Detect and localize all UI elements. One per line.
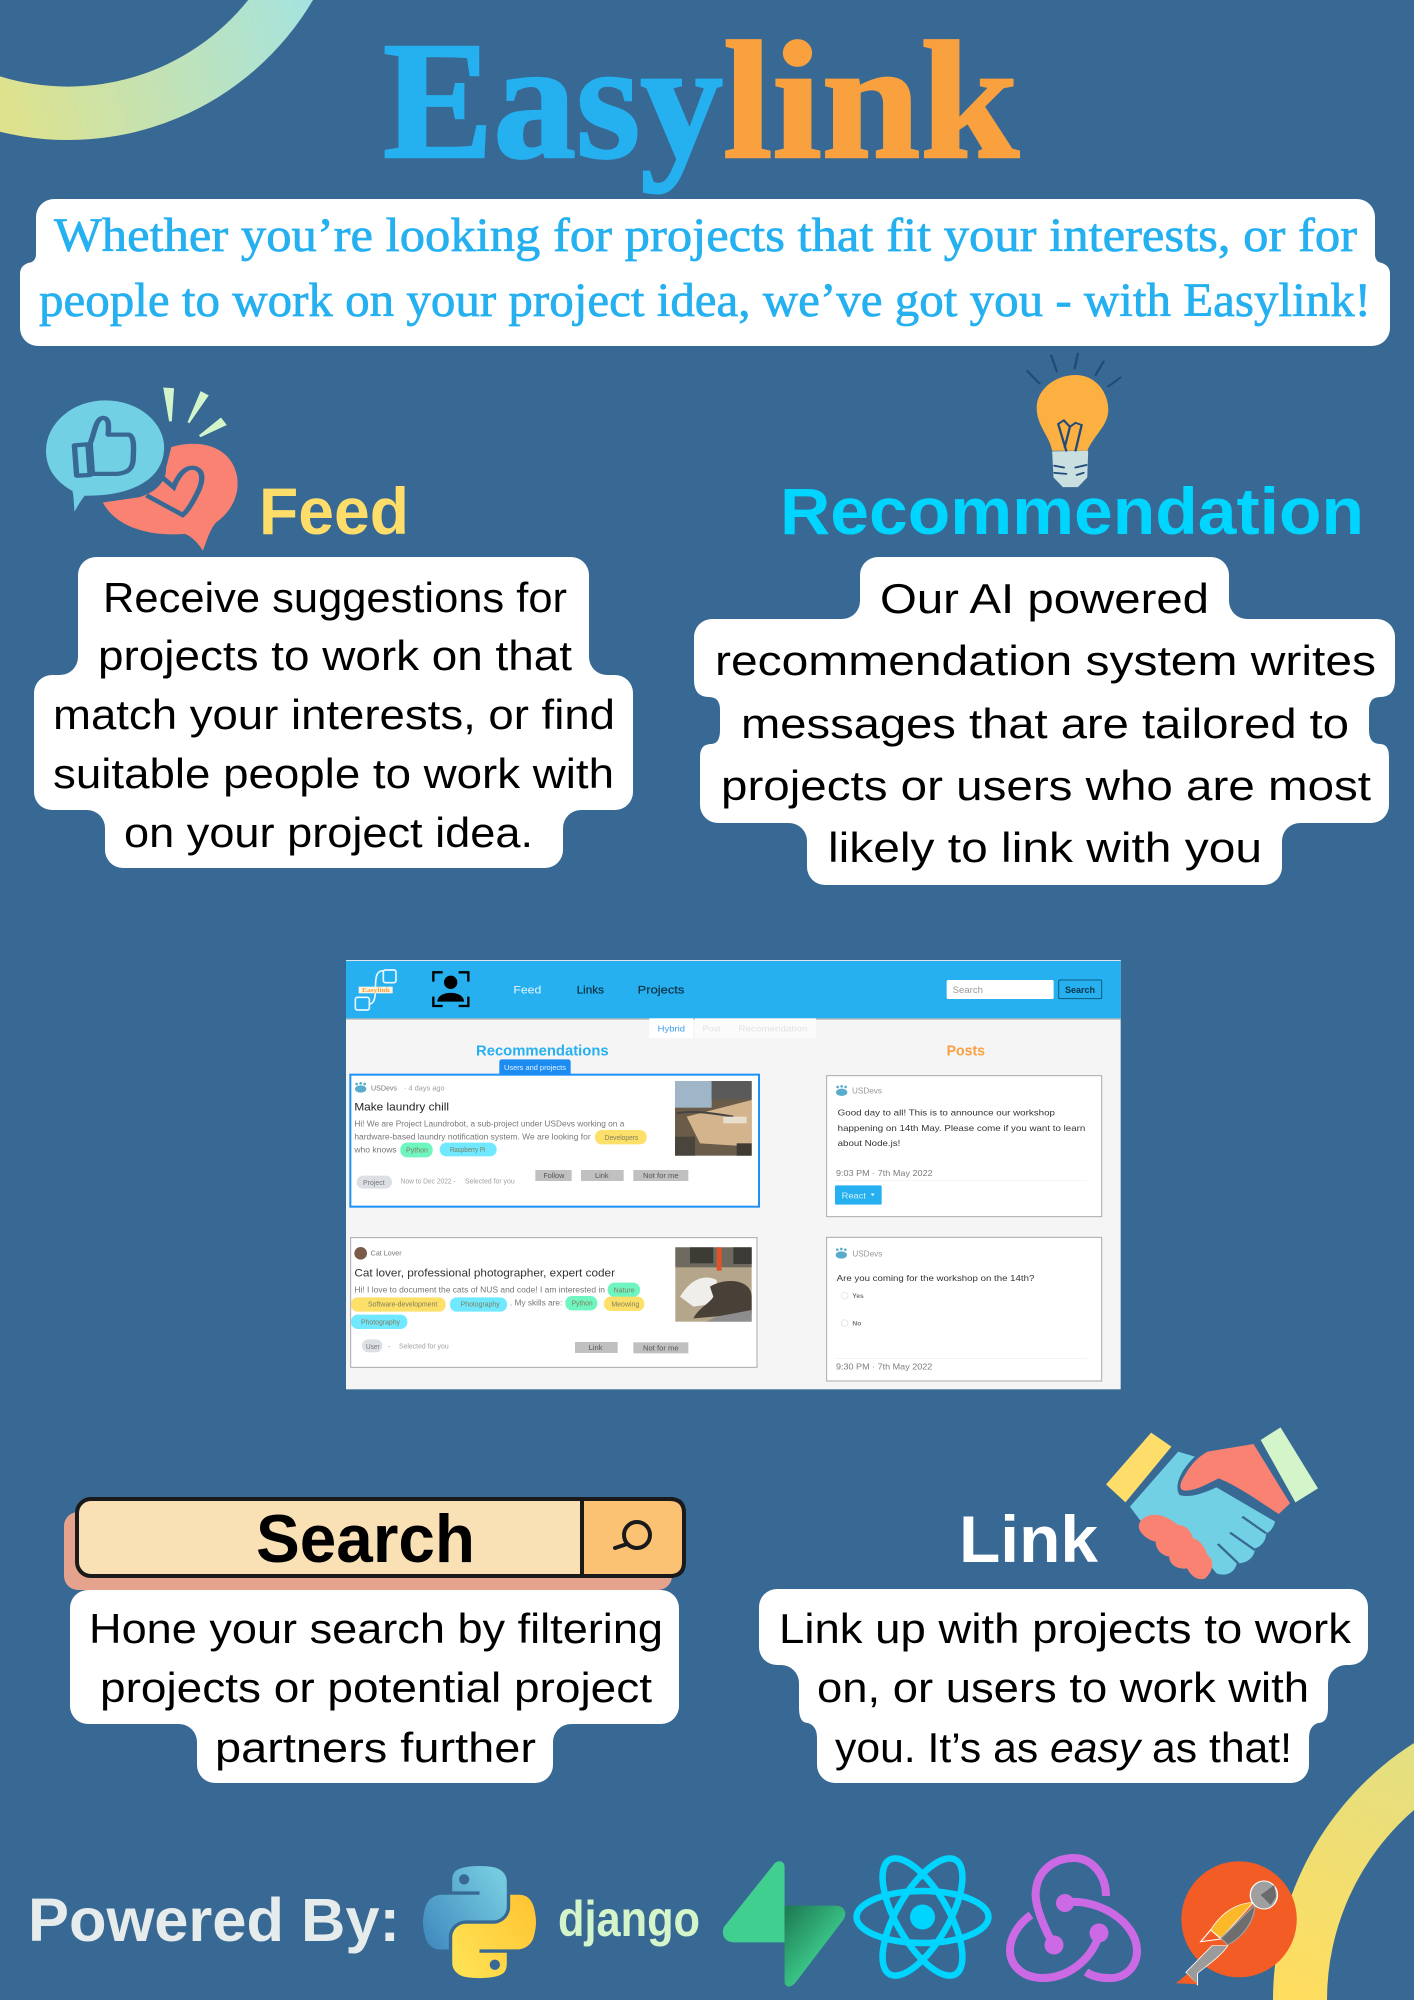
card: user recommendation: - <box>388 1341 391 1350</box>
panel: feed description: Receive suggestions for <box>103 574 567 621</box>
card: project recommendation: · 4 days ago <box>404 1083 445 1092</box>
panel: recommendation description <box>694 557 1395 885</box>
card: project recommendation: Python <box>406 1145 428 1154</box>
card: user recommendation: Nature <box>614 1285 635 1294</box>
panel: link description <box>759 1589 1368 1783</box>
panel: recommendation description: Our AI powered <box>880 575 1209 622</box>
card: user recommendation <box>351 1238 757 1367</box>
card: project recommendation: USDevs <box>371 1083 397 1092</box>
card: user recommendation: Cat Lover <box>371 1248 402 1257</box>
card: user recommendation: User <box>366 1342 380 1351</box>
panel: link description: Link up with projects to work <box>779 1605 1352 1652</box>
card: workshop post: happening on 14th May. Please come if you want to learn <box>838 1123 1086 1133</box>
navigation: Projects <box>638 985 685 997</box>
panel: recommendation description: messages that are tailored to <box>741 700 1349 747</box>
card: project recommendation <box>350 1075 759 1207</box>
logo: django: django <box>558 1891 700 1947</box>
screenshot: Easylink app <box>346 960 1121 1389</box>
navigation <box>513 985 685 997</box>
card: poll post: Yes <box>852 1294 864 1300</box>
icon: postman logo <box>1176 1861 1297 1985</box>
card: user recommendation: Cat lover, professional photographer, expert coder <box>354 1267 615 1279</box>
tabs <box>649 1018 816 1038</box>
card: project recommendation: who knows <box>353 1144 397 1154</box>
panel: feed description: match your interests, or find <box>53 691 615 738</box>
tabs: Recomendation <box>738 1024 808 1034</box>
card: project recommendation: Now to Dec 2022 - <box>401 1176 456 1185</box>
card: poll post <box>827 1237 1102 1381</box>
card: user recommendation: Not for me <box>643 1343 679 1352</box>
navigation: Links <box>577 985 604 997</box>
card: project recommendation: Selected for you <box>465 1176 515 1185</box>
card: workshop post: React <box>842 1190 867 1200</box>
panel: feed description: on your project idea. <box>124 809 533 856</box>
card: user recommendation: Hi! I love to document the cats of NUS and code! I am interested in <box>354 1284 605 1294</box>
heading: Feed: Feed <box>259 474 409 548</box>
heading: Recommendations: Recommendations <box>476 1043 609 1059</box>
card: workshop post: 9:03 PM · 7th May 2022 <box>836 1168 933 1178</box>
card: poll post: No <box>852 1321 862 1327</box>
card: workshop post: about Node.js! <box>838 1138 900 1148</box>
card: user recommendation: Photography <box>361 1318 400 1327</box>
card: project recommendation: Raspberry Pi <box>450 1145 486 1154</box>
user icon <box>433 972 468 1006</box>
heading: Recommendation: Recommendation <box>780 474 1364 548</box>
card: workshop post: USDevs <box>852 1086 882 1096</box>
decorative arc: bottom right <box>1273 1743 1414 2000</box>
navigation: Feed <box>513 985 541 997</box>
label: Powered By: Powered By: <box>28 1886 400 1954</box>
card: poll post: USDevs <box>852 1249 882 1259</box>
card: project recommendation: Project <box>363 1178 385 1187</box>
icon: supabase logo <box>723 1861 845 1987</box>
card: user recommendation: Python <box>572 1299 593 1308</box>
title <box>383 8 1020 194</box>
card: user recommendation: Software-development <box>368 1300 437 1309</box>
icon: light bulb <box>1027 354 1120 487</box>
card: project recommendation: Not for me <box>643 1171 679 1180</box>
icon: handshake <box>1106 1427 1318 1579</box>
photo: cat <box>675 1247 752 1322</box>
panel: recommendation description: recommendation system writes <box>715 637 1376 684</box>
card: project recommendation: hardware-based laundry notification system. We are looking for <box>354 1131 591 1141</box>
search field: Search <box>1065 985 1095 995</box>
panel: feed description <box>34 557 633 868</box>
panel: search description: partners further <box>215 1724 536 1771</box>
search bar heading: Search <box>256 1501 475 1577</box>
tab: users and projects: Users and projects <box>504 1063 566 1072</box>
card: poll post: 9:30 PM · 7th May 2022 <box>836 1361 933 1371</box>
card: user recommendation: Photography <box>461 1300 500 1309</box>
title: link <box>723 8 1020 194</box>
icon: feed speech bubbles <box>44 387 238 551</box>
icon: python logo <box>423 1866 536 1978</box>
card: project recommendation: Hi! We are Project Laundrobot, a sub-project under USDevs working on a <box>354 1119 625 1129</box>
panel: link description: you. It’s as easy as that! <box>835 1724 1292 1771</box>
icon: react logo <box>856 1847 988 1987</box>
panel: recommendation description: likely to link with you <box>828 824 1262 871</box>
card: project recommendation: Make laundry chill <box>354 1102 449 1114</box>
photo: laundry hardware <box>675 1081 752 1156</box>
tagline panel <box>20 199 1390 346</box>
tagline panel: people to work on your project idea, we’ve got you - with Easylink! <box>39 274 1371 327</box>
app logo: Easylink <box>362 988 391 994</box>
tab: users and projects <box>499 1059 571 1074</box>
tabs: Post <box>703 1024 721 1034</box>
search field: Search <box>953 985 983 995</box>
right column <box>827 980 1102 1381</box>
card: project recommendation: Follow <box>543 1171 565 1180</box>
panel: search description <box>70 1590 679 1783</box>
search bar heading <box>64 1499 684 1590</box>
panel: feed description: projects to work on that <box>98 632 572 679</box>
app logo <box>355 970 396 1010</box>
panel: link description: on, or users to work with <box>817 1664 1309 1711</box>
icon: redux logo <box>1010 1858 1137 1978</box>
panel: search description: Hone your search by filtering <box>89 1605 663 1652</box>
heading: Link: Link <box>959 1502 1098 1576</box>
title: Easy <box>383 8 723 194</box>
card: poll post: Are you coming for the workshop on the 14th? <box>837 1273 1035 1283</box>
panel: feed description: suitable people to work with <box>53 750 614 797</box>
heading: Posts: Posts <box>947 1043 985 1059</box>
card: user recommendation: Meowing <box>611 1299 639 1308</box>
card: project recommendation: Link <box>595 1171 609 1180</box>
panel: recommendation description: projects or users who are most <box>721 762 1371 809</box>
card: user recommendation: Link <box>589 1343 602 1352</box>
card: user recommendation: Selected for you <box>399 1341 449 1350</box>
tagline panel: Whether you’re looking for projects that fit your interests, or for <box>54 209 1357 262</box>
card: workshop post <box>827 1076 1102 1217</box>
panel: search description: projects or potential project <box>100 1664 652 1711</box>
card: workshop post: Good day to all! This is to announce our workshop <box>838 1108 1055 1118</box>
search field <box>947 980 1102 999</box>
card: project recommendation: Developers <box>605 1133 639 1142</box>
decorative arc: top left <box>0 0 313 140</box>
card: user recommendation: . My skills are: <box>510 1298 562 1308</box>
tabs: Hybrid <box>658 1024 685 1034</box>
